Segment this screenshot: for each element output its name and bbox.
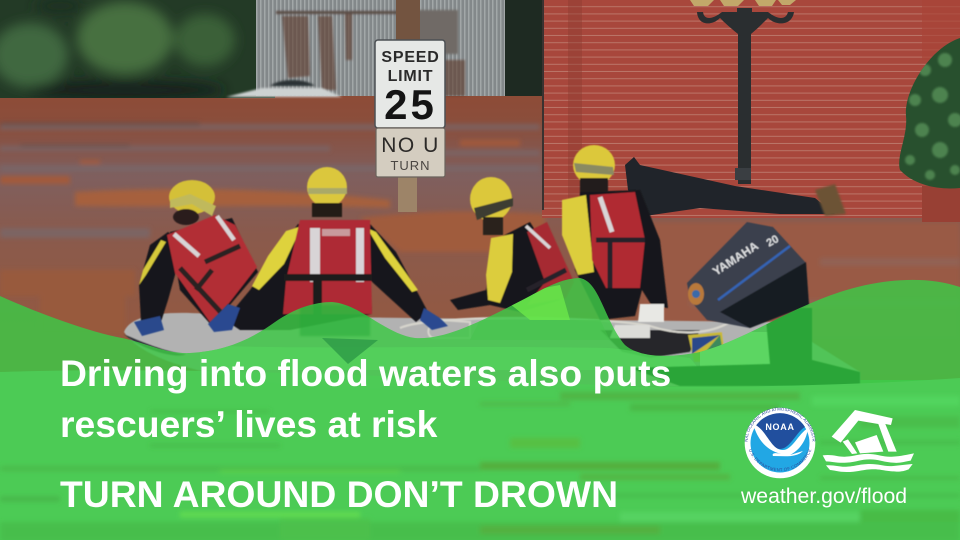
outboard motor: 20: [764, 233, 781, 250]
road sign: 25: [384, 81, 437, 128]
headline: Driving into flood waters also puts: [60, 352, 671, 394]
corrugated building: [256, 0, 542, 96]
road sign: NO U: [381, 134, 440, 157]
icon: NOAA logo: [744, 408, 816, 478]
rescuer 4: [562, 145, 668, 322]
icon: NOAA logo: U.S. DEPARTMENT OF COMMERCE: [749, 448, 812, 472]
headline: [60, 352, 671, 445]
submerged vehicle in water: [226, 80, 342, 97]
road sign: [375, 40, 445, 212]
brick wall: [542, 0, 960, 222]
icon: NOAA logo: NOAA: [765, 422, 795, 432]
lamp post: [690, 0, 796, 184]
trees: [0, 0, 275, 100]
green boat seen through water: [200, 285, 860, 386]
bush: [899, 38, 960, 188]
headline: rescuers’ lives at risk: [60, 403, 438, 445]
road sign: SPEED: [381, 49, 440, 66]
road sign: TURN: [390, 158, 431, 173]
rescuer 2: [208, 167, 448, 332]
rescuer 3: [450, 177, 574, 312]
green wave overlay: [0, 278, 960, 540]
flood water background: [0, 90, 960, 380]
tarp: [625, 157, 835, 216]
slogan: TURN AROUND DON’T DROWN: [60, 473, 618, 515]
inflatable boat: [124, 313, 860, 388]
outboard motor: YAMAHA: [710, 239, 761, 279]
road sign: LIMIT: [388, 68, 433, 85]
outboard motor: [687, 222, 809, 328]
water streaks: [0, 392, 960, 540]
photo: flood rescue scene: [0, 0, 960, 388]
lighter water band: [0, 370, 960, 540]
icon: NOAA logo: NATIONAL OCEANIC AND ATMOSPHERIC ADMINISTRATION: [744, 408, 816, 442]
icon: flooded house: [823, 410, 914, 472]
website link: weather.gov/flood: [740, 485, 907, 508]
rescuer 1: [134, 180, 258, 336]
